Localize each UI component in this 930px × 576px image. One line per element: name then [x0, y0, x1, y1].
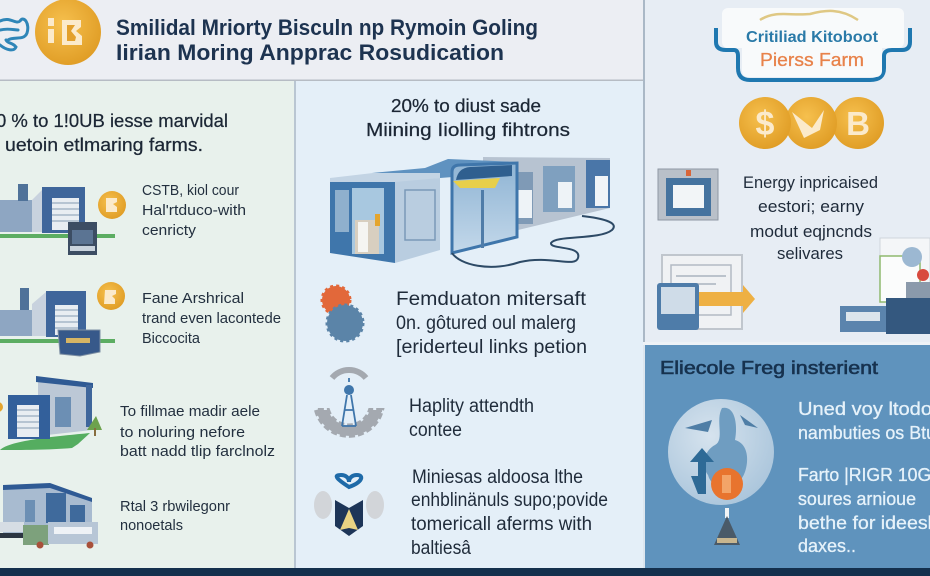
text: blue panel body: daxes.. [798, 536, 856, 556]
text: blue panel body [798, 399, 930, 556]
text: center item 1: Femduaton mitersaft [396, 289, 587, 310]
title: Iirian Moring Anpprac Rosudication [116, 40, 504, 65]
icon: orange and blue gears [322, 286, 363, 341]
center heading: 20% to diust sade [391, 96, 541, 116]
icon: three coins [739, 97, 884, 149]
text: item 1: Hal'rtduco-with [142, 202, 246, 219]
left heading: 0 % to 1!0UB iesse marvidal [0, 111, 228, 131]
illustration: farm building with truck [0, 184, 115, 255]
text: blue panel body: soures arnioue [798, 489, 916, 509]
icon: header coin [35, 0, 101, 65]
text: item 2 [142, 290, 281, 347]
panel: right energy [643, 0, 930, 345]
text: center item 3: Miniesas aldoosa lthe [412, 467, 583, 488]
text: center item 3 [411, 467, 608, 559]
text: center item 1 [396, 289, 587, 358]
text: center item 3: enhblinänuls supo;povide [411, 490, 608, 511]
left heading: uetoin etlmaring farms. [5, 135, 203, 155]
illustration: globe with arrow and coin [668, 399, 774, 545]
text: item 2: trand even lacontede [142, 310, 281, 327]
badge: farm title: Critiliad Kitoboot [746, 29, 879, 46]
center heading [366, 96, 570, 140]
panel: blue bottom-right [643, 345, 930, 568]
blue panel heading: Eliecole Freg insterient [660, 358, 878, 378]
text: item 4: nonoetals [120, 517, 183, 534]
icon: coin 2 [97, 282, 125, 310]
text: right description: Energy inpricaised [743, 173, 878, 192]
illustration: farm building with container [0, 483, 98, 548]
illustration: farm building with tree [0, 376, 102, 450]
badge: farm title [716, 8, 910, 80]
badge: farm title: Pierss Farm [760, 50, 864, 70]
text: item 4: Rtal 3 rbwilegonr [120, 498, 230, 515]
illustration: farm building with panel [0, 288, 115, 356]
text: center item 2: Haplity attendth [409, 396, 534, 417]
title [116, 15, 538, 65]
text: center item 2 [409, 396, 534, 441]
icon: cloud network [0, 19, 28, 50]
text: center item 2: contee [409, 420, 462, 441]
text: blue panel body: bethe for ideesl [798, 513, 930, 533]
footer bar [0, 568, 930, 576]
text: item 3: batt nadd tlip farclnolz [120, 443, 275, 460]
text: center item 1: [eriderteul links petion [396, 337, 587, 358]
text: right description [743, 173, 878, 263]
center heading: Miining Iiolling fihtrons [366, 120, 570, 140]
illustration: server cluster [840, 238, 930, 334]
panel: left mining farms [0, 81, 296, 568]
header band [0, 0, 644, 82]
text: item 1: CSTB, kiol cour [142, 182, 239, 199]
text: item 2: Biccocita [142, 330, 201, 347]
icon: three coins: B [846, 105, 870, 142]
illustration: mining containers with cable [330, 157, 614, 267]
text: item 1: cenricty [142, 222, 197, 239]
panel: center mining holdings [296, 81, 643, 568]
text: item 3 [120, 403, 275, 460]
text: item 4 [120, 498, 230, 534]
text: right description: eestori; earny [758, 197, 865, 216]
text: center item 3: tomericall aferms with [411, 514, 592, 535]
left heading [0, 111, 228, 155]
text: right description: modut eqjncnds [750, 222, 872, 241]
text: center item 3: baltiesâ [411, 538, 471, 559]
icon: monitor [658, 169, 718, 220]
icon: shield and knot [314, 475, 384, 536]
icon: tower on gear [316, 370, 382, 436]
text: item 3: to noluring nefore [120, 424, 245, 441]
text: center item 1: 0n. gôtured oul malerg [396, 313, 576, 334]
title: Smilidal Mriorty Bisculn np Rymoin Goling [116, 15, 538, 40]
text: item 3: To fillmae madir aele [120, 403, 260, 420]
icon: three coins: $ [756, 105, 775, 143]
icon: coin 1 [98, 191, 126, 219]
text: right description: selivares [777, 244, 843, 263]
text: item 1 [142, 182, 246, 239]
text: item 2: Fane Arshrical [142, 290, 244, 307]
text: blue panel body: Uned voy ltodo [798, 399, 930, 419]
icon: document, tablet and arrow [657, 255, 755, 330]
